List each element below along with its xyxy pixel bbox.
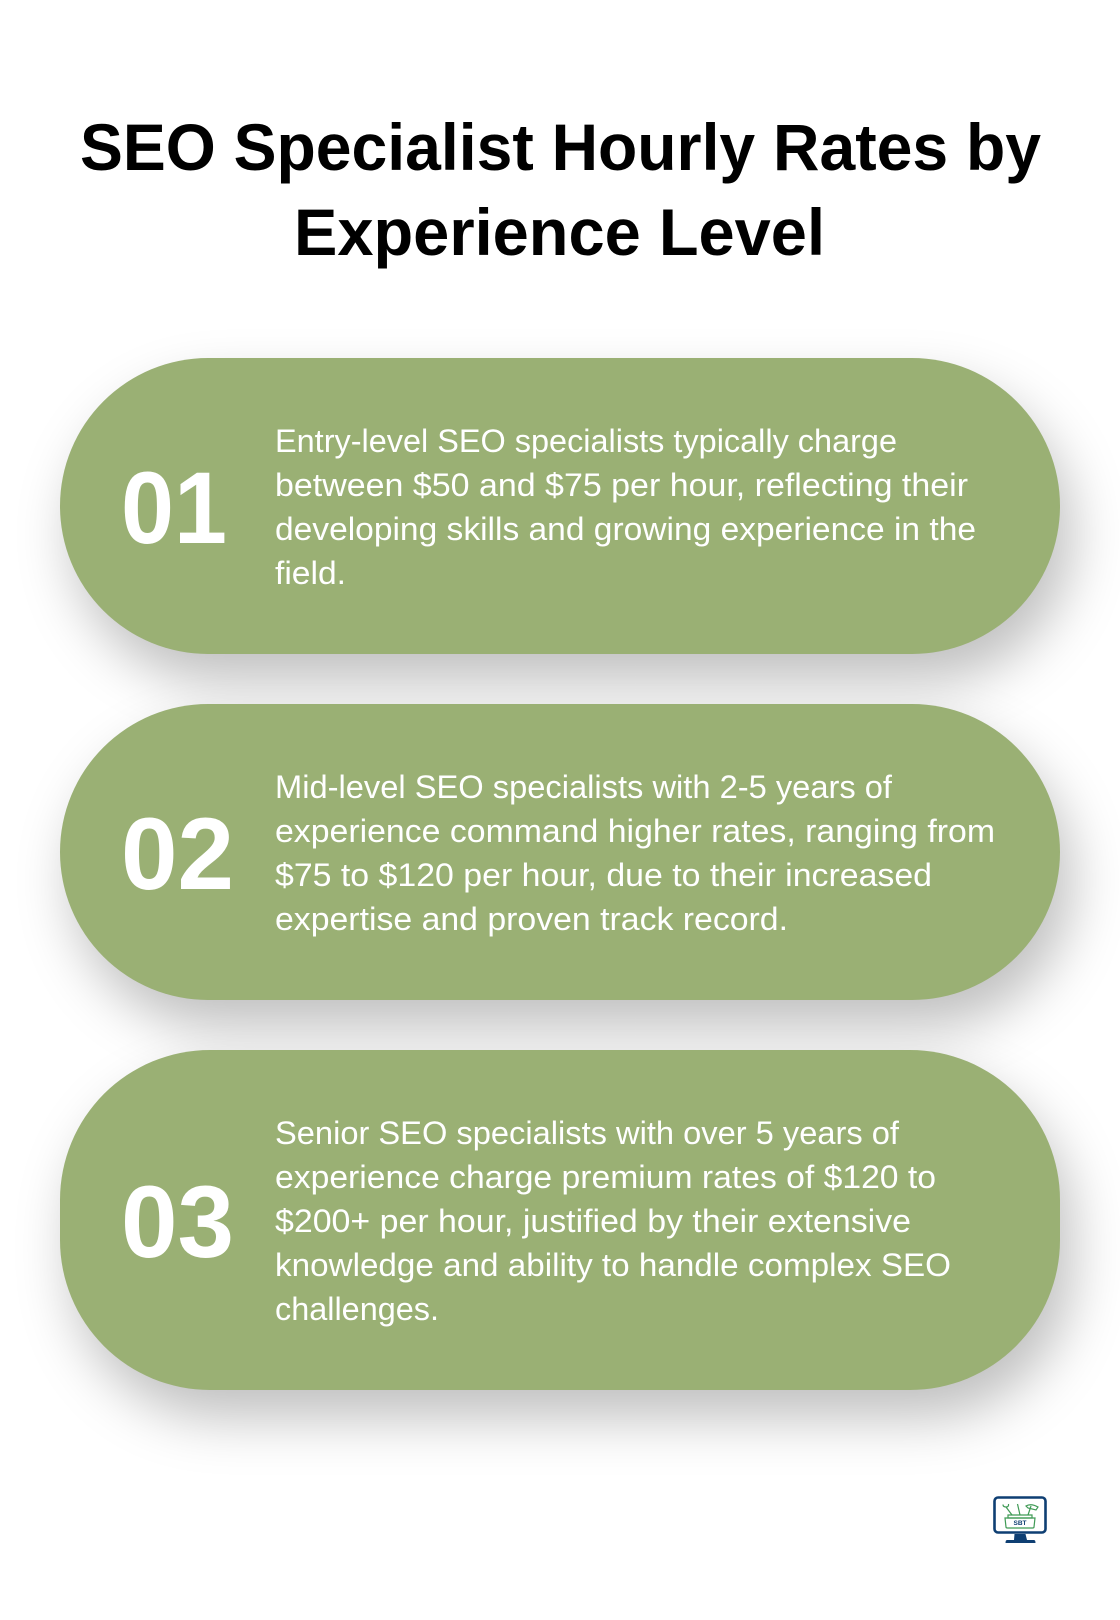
text block: entry-level [275,423,976,591]
text block: senior: experience charge premium rates of $120 to [275,1159,936,1195]
text block: senior: challenges. [275,1291,439,1327]
text block: mid-level: $75 to $120 per hour, due to their increased [275,857,932,893]
text block: mid-level: experience command higher rates, ranging from [275,813,995,849]
title [80,110,1041,269]
text block: mid-level: Mid-level SEO specialists with 2-5 years of [275,769,892,805]
icon: monitor with toolbox logo [994,1498,1046,1543]
text block: senior: Senior SEO specialists with over 5 years of [275,1115,899,1151]
text block: entry-level: between $50 and $75 per hour, reflecting their [275,467,968,503]
panel: card 3 background [60,1050,1060,1390]
text block: senior: $200+ per hour, justified by their extensive [275,1203,911,1239]
text block: mid-level: expertise and proven track record. [275,901,788,937]
text block: senior: knowledge and ability to handle complex SEO [275,1247,951,1283]
number 01: 01 [121,451,227,565]
text block: mid-level [275,769,995,937]
text block: entry-level: developing skills and growing experience in the [275,511,976,547]
text block: entry-level: Entry-level SEO specialists typically charge [275,423,897,459]
text block: senior [275,1115,951,1327]
icon: monitor with toolbox logo: SBT [1014,1520,1027,1527]
number 02: 02 [121,797,234,911]
title: Experience Level [294,195,825,269]
panel: card 2 background [60,704,1060,1000]
number 03: 03 [121,1165,234,1279]
text block: entry-level: field. [275,555,346,591]
title: SEO Specialist Hourly Rates by [80,110,1041,184]
panel: card 1 background [60,358,1060,654]
